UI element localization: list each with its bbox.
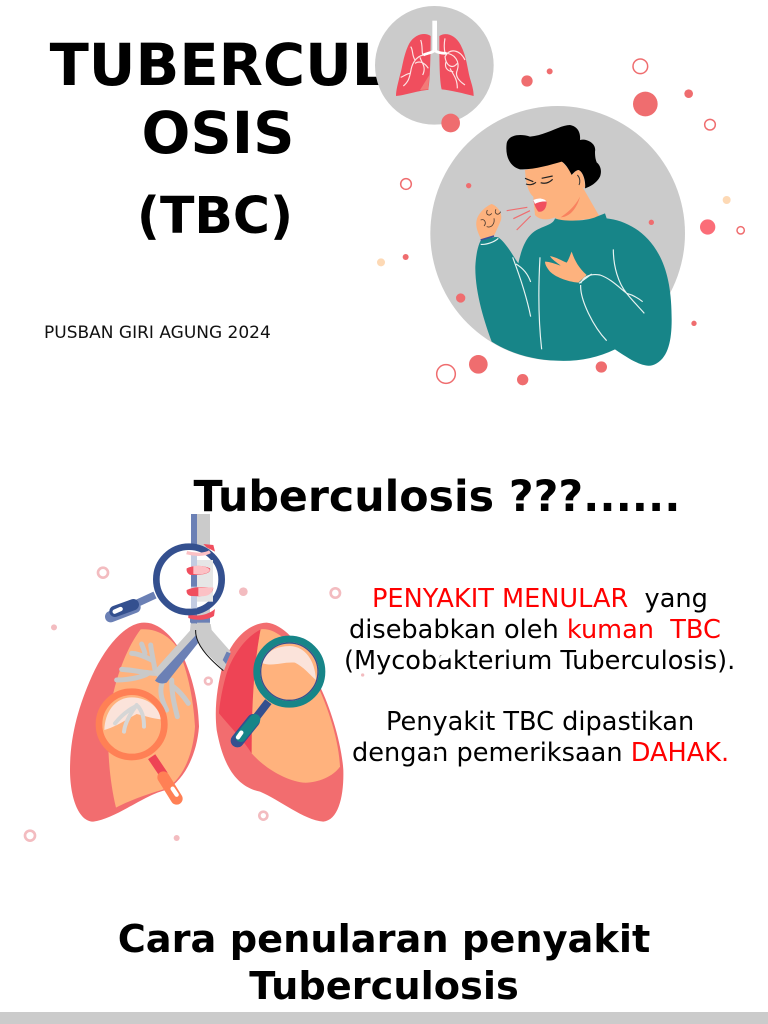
hair <box>506 125 601 188</box>
sweater folds <box>481 238 644 349</box>
organisation and year: PUSBAN GIRI AGUNG 2024 <box>44 323 271 343</box>
hand on chest <box>545 252 587 283</box>
illustration: coughing man with droplets <box>375 6 744 385</box>
heading: cara penularan: Tuberculosis <box>249 964 519 1009</box>
title <box>50 32 388 245</box>
sweater <box>475 213 672 366</box>
section heading: Tuberculosis ???...... <box>194 472 680 522</box>
man <box>475 125 672 366</box>
bottom grey bar <box>0 1012 768 1024</box>
droplets <box>377 59 744 385</box>
title: OSIS <box>141 100 295 167</box>
grey circle behind man <box>430 106 685 361</box>
magnifier: teal <box>237 639 322 741</box>
magnifier: blue <box>111 544 222 617</box>
description text <box>344 584 735 768</box>
icon: lungs in grey circle <box>375 6 494 125</box>
left lung <box>70 623 199 822</box>
face and neck <box>525 161 600 223</box>
cough lines <box>507 207 531 230</box>
heading: cara penularan <box>118 917 650 1009</box>
mouth <box>533 198 547 212</box>
description text: disebabkan oleh kuman TBC <box>349 615 721 645</box>
illustration: lungs with magnifying glasses <box>25 514 364 841</box>
right lung <box>216 623 343 822</box>
trachea and bronchi <box>153 514 231 683</box>
description text: Penyakit TBC dipastikan <box>386 707 694 737</box>
background dots <box>25 568 364 841</box>
fist <box>476 204 501 241</box>
title: (TBC) <box>137 186 293 245</box>
eyes <box>525 176 553 185</box>
description text: PENYAKIT MENULAR yang <box>372 584 708 614</box>
title: TUBERCUL <box>50 32 388 99</box>
heading: cara penularan: Cara penularan penyakit <box>118 917 650 962</box>
description text: (Mycobakterium Tuberculosis). <box>344 646 735 676</box>
magnifier: orange <box>99 692 177 799</box>
description text: dengan pemeriksaan DAHAK. <box>352 738 729 768</box>
